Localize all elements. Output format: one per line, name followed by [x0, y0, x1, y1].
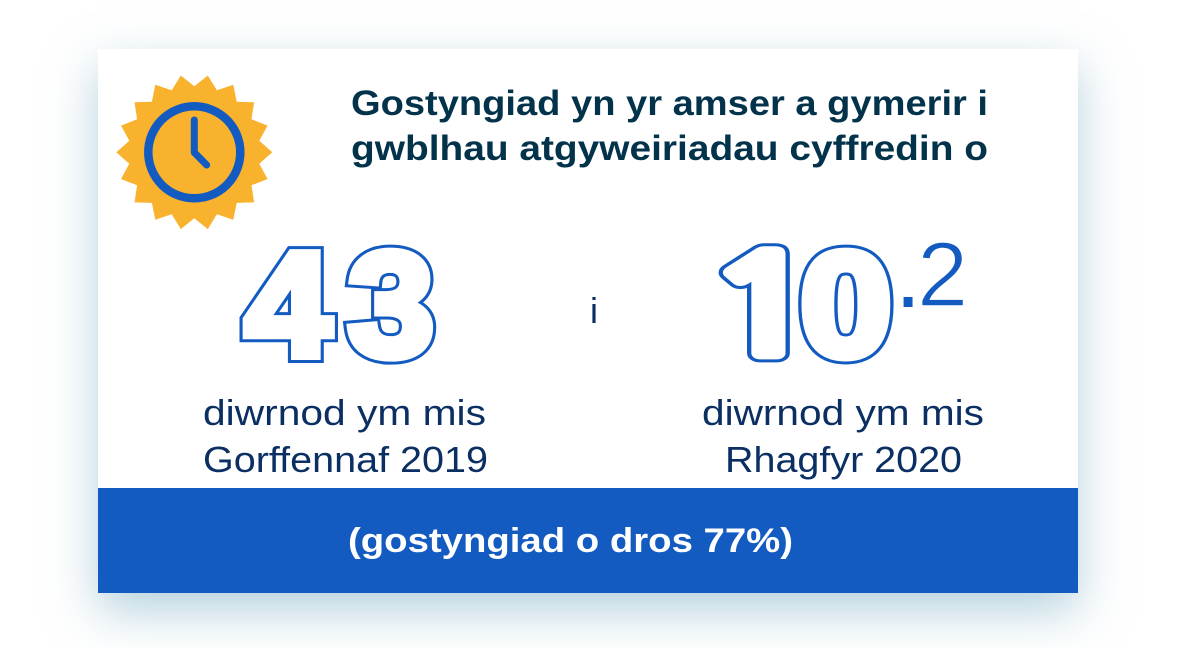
- big number: 10.2: 1: [704, 240, 824, 376]
- big number: 10.2: 2: [917, 224, 968, 326]
- footer text: (gostyngiad o dros 77%): [348, 522, 793, 560]
- big number: 10.2: [704, 222, 968, 388]
- heading: [351, 84, 988, 168]
- heading: Gostyngiad yn yr amser a gymerir i: [351, 84, 988, 123]
- icon: clock on sunburst badge: [116, 76, 272, 229]
- caption: December 2020: diwrnod ym mis: [702, 392, 984, 433]
- big number: 10.2: 1: [704, 240, 824, 376]
- caption: December 2020: Rhagfyr 2020: [725, 439, 962, 480]
- caption: July 2019: diwrnod ym mis: [203, 392, 486, 433]
- big number: 43: 4: [245, 222, 331, 388]
- footer bar: [98, 488, 1078, 593]
- big number: 43: 3: [348, 222, 434, 388]
- big number: 43: 3: [348, 222, 434, 388]
- big number: 10.2: 0: [800, 222, 892, 388]
- big number: 10.2: .: [895, 222, 921, 327]
- caption: July 2019: Gorffennaf 2019: [203, 439, 488, 480]
- big number: 43: 4: [245, 222, 331, 388]
- card background: [98, 49, 1078, 593]
- caption: December 2020: [702, 392, 984, 480]
- heading: gwblhau atgyweiriadau cyffredin o: [351, 129, 988, 168]
- big number: 43: [245, 222, 434, 388]
- big number: 10.2: 0: [800, 222, 892, 388]
- connector word: i: [590, 290, 598, 331]
- caption: July 2019: [203, 392, 488, 480]
